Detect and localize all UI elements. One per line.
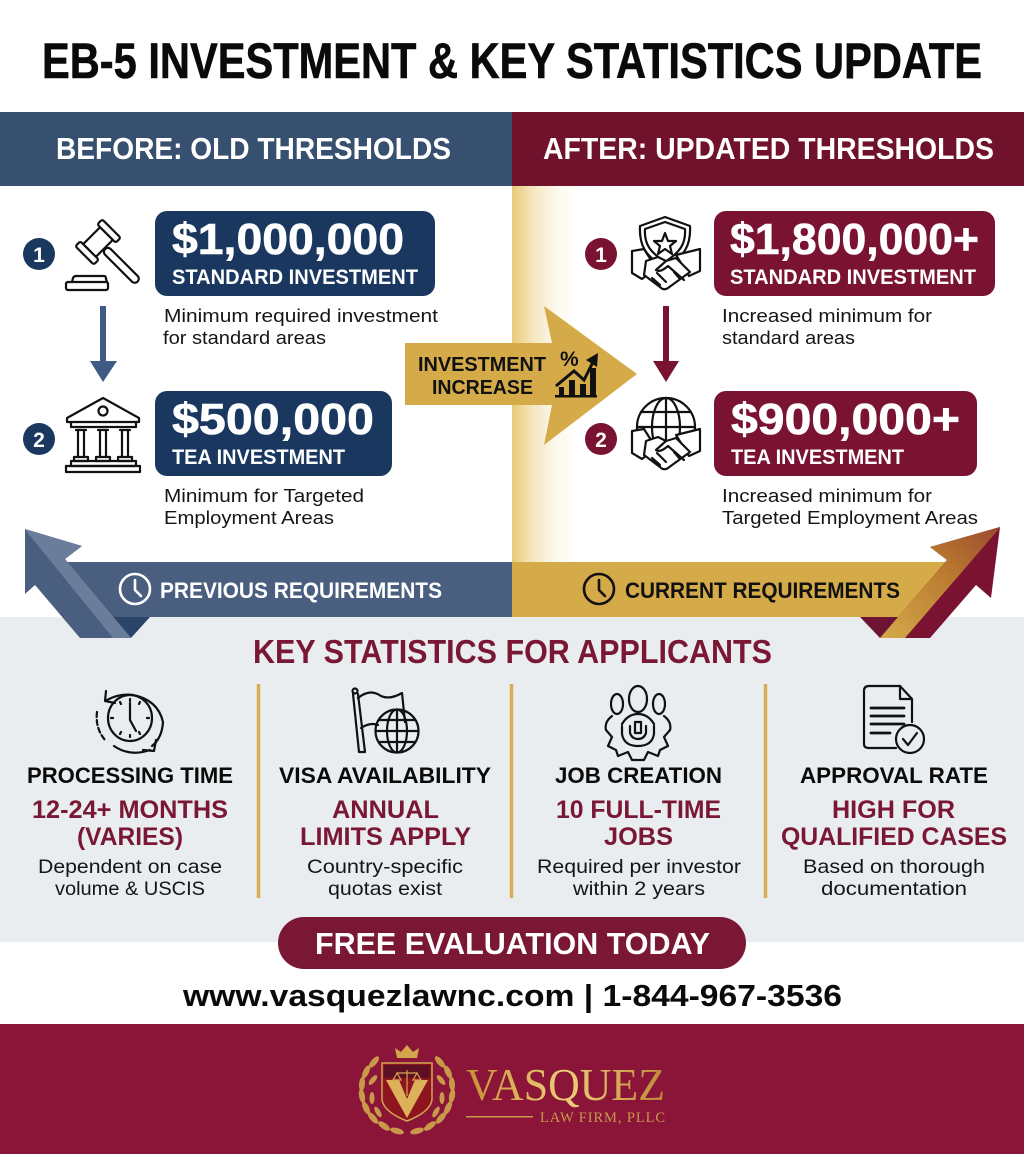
call to action button — [278, 917, 746, 969]
icon: clock — [120, 574, 150, 604]
stat: job creation: within 2 years — [572, 878, 705, 900]
stat: job creation: JOB CREATION — [555, 763, 722, 788]
description 1: Minimum required investment — [164, 305, 438, 326]
icon: document check — [864, 686, 924, 753]
number badge 2 — [585, 423, 617, 455]
footer — [0, 1024, 1024, 1154]
arrow: investment increase: INCREASE — [432, 377, 533, 399]
stat: processing time — [27, 691, 233, 900]
ribbon: current requirements: CURRENT REQUIREMENTS — [625, 578, 900, 603]
number badge 2 — [23, 423, 55, 455]
description 1 — [163, 305, 438, 348]
arrow: down blue — [90, 306, 117, 382]
stat: visa availability: Country-specific — [307, 856, 463, 878]
contact line: www.vasquezlawnc.com | 1-844-967-3536 — [182, 978, 842, 1013]
stat: job creation: JOBS — [604, 823, 673, 851]
investment badge 1 — [714, 211, 995, 296]
ribbon: previous requirements: PREVIOUS REQUIREMENTS — [160, 578, 442, 603]
gold fade background — [512, 186, 578, 562]
description 1: Increased minimum for — [722, 305, 932, 326]
stat: approval rate: Based on thorough — [803, 856, 985, 878]
icon: growth chart: % — [560, 348, 579, 371]
description 2: Minimum for Targeted — [164, 485, 364, 506]
description 2: Increased minimum for — [722, 485, 932, 506]
stat: visa availability: VISA AVAILABILITY — [279, 763, 491, 788]
icon: team gear — [606, 686, 670, 760]
icon: bank — [66, 398, 140, 472]
logo: vasquez law firm: VASQUEZ — [466, 1059, 665, 1110]
heading: key statistics: KEY STATISTICS FOR APPLICANTS — [253, 633, 772, 670]
number badge 1 — [585, 238, 617, 270]
investment badge 2 — [714, 391, 977, 476]
logo: vasquez law firm — [358, 1045, 665, 1136]
description 1 — [722, 305, 932, 348]
logo laurel left — [358, 1055, 405, 1136]
logo: vasquez law firm: LAW FIRM, PLLC — [540, 1110, 665, 1126]
investment badge 1: $1,800,000+ — [730, 215, 979, 264]
stat: visa availability: quotas exist — [328, 878, 443, 900]
description 2: Employment Areas — [164, 507, 334, 528]
icon: clock cycle — [97, 691, 163, 753]
investment badge 2: TEA INVESTMENT — [172, 446, 345, 469]
stat: approval rate — [781, 686, 1007, 900]
stat: approval rate: QUALIFIED CASES — [781, 823, 1007, 851]
stat: job creation: 10 FULL-TIME — [556, 796, 721, 824]
arrow: current up-right — [860, 527, 1000, 638]
panel: updated thresholds — [585, 211, 995, 528]
investment badge 2: TEA INVESTMENT — [731, 446, 904, 469]
panel: key statistics background — [0, 617, 1024, 942]
stat: processing time: 12-24+ MONTHS — [32, 796, 228, 824]
icon: clock — [584, 574, 614, 604]
ribbon: previous requirements — [62, 562, 512, 617]
icon: globe handshake — [632, 398, 700, 469]
description 1: standard areas — [722, 327, 855, 348]
call to action button: FREE EVALUATION TODAY — [315, 926, 710, 961]
stat: job creation: Required per investor — [537, 856, 742, 878]
number badge 1 — [23, 238, 55, 270]
number badge 1: 1 — [595, 244, 607, 267]
logo crown — [395, 1045, 419, 1058]
investment badge 1: $1,000,000 — [172, 215, 404, 264]
stat: processing time: (VARIES) — [77, 823, 183, 851]
description 2 — [164, 485, 364, 528]
investment badge 2: $500,000 — [172, 395, 374, 444]
stat: processing time: Dependent on case — [38, 856, 222, 878]
icon: shield handshake — [632, 217, 700, 289]
panel: after header: AFTER: UPDATED THRESHOLDS — [543, 131, 994, 166]
stat: visa availability: LIMITS APPLY — [300, 823, 471, 851]
ribbon: current requirements — [512, 562, 950, 617]
panel: before header — [0, 112, 512, 186]
stat: visa availability — [279, 688, 491, 900]
number badge 1: 1 — [33, 244, 45, 267]
panel: old thresholds — [23, 211, 438, 528]
number badge 2: 2 — [595, 429, 607, 452]
investment badge 1: STANDARD INVESTMENT — [172, 266, 418, 289]
description 1: for standard areas — [163, 327, 326, 348]
panel: before header: BEFORE: OLD THRESHOLDS — [56, 131, 451, 166]
stat: visa availability: ANNUAL — [332, 796, 439, 824]
arrow: previous up-left — [25, 529, 150, 638]
description 2: Targeted Employment Areas — [722, 507, 978, 528]
investment badge 1: STANDARD INVESTMENT — [730, 266, 976, 289]
stat: processing time: volume & USCIS — [55, 878, 205, 900]
arrow: down crimson — [653, 306, 679, 382]
investment badge 1 — [155, 211, 435, 296]
logo laurel right — [409, 1055, 456, 1136]
panel: after header — [512, 112, 1024, 186]
number badge 2: 2 — [33, 429, 45, 452]
description 2 — [722, 485, 978, 528]
icon: flag and globe — [352, 688, 418, 752]
icon: gavel — [66, 219, 151, 295]
logo shield — [382, 1063, 432, 1121]
icon: growth chart — [555, 348, 598, 398]
stat: approval rate: documentation — [821, 878, 967, 900]
dividers — [258, 684, 766, 898]
arrow: investment increase: INVESTMENT — [418, 354, 546, 376]
stat: job creation — [537, 686, 742, 900]
investment badge 2 — [155, 391, 392, 476]
investment badge 2: $900,000+ — [731, 395, 960, 444]
arrow: investment increase — [405, 306, 637, 445]
stat: approval rate: HIGH FOR — [832, 796, 955, 824]
stat: approval rate: APPROVAL RATE — [800, 763, 988, 788]
stat: processing time: PROCESSING TIME — [27, 763, 233, 788]
